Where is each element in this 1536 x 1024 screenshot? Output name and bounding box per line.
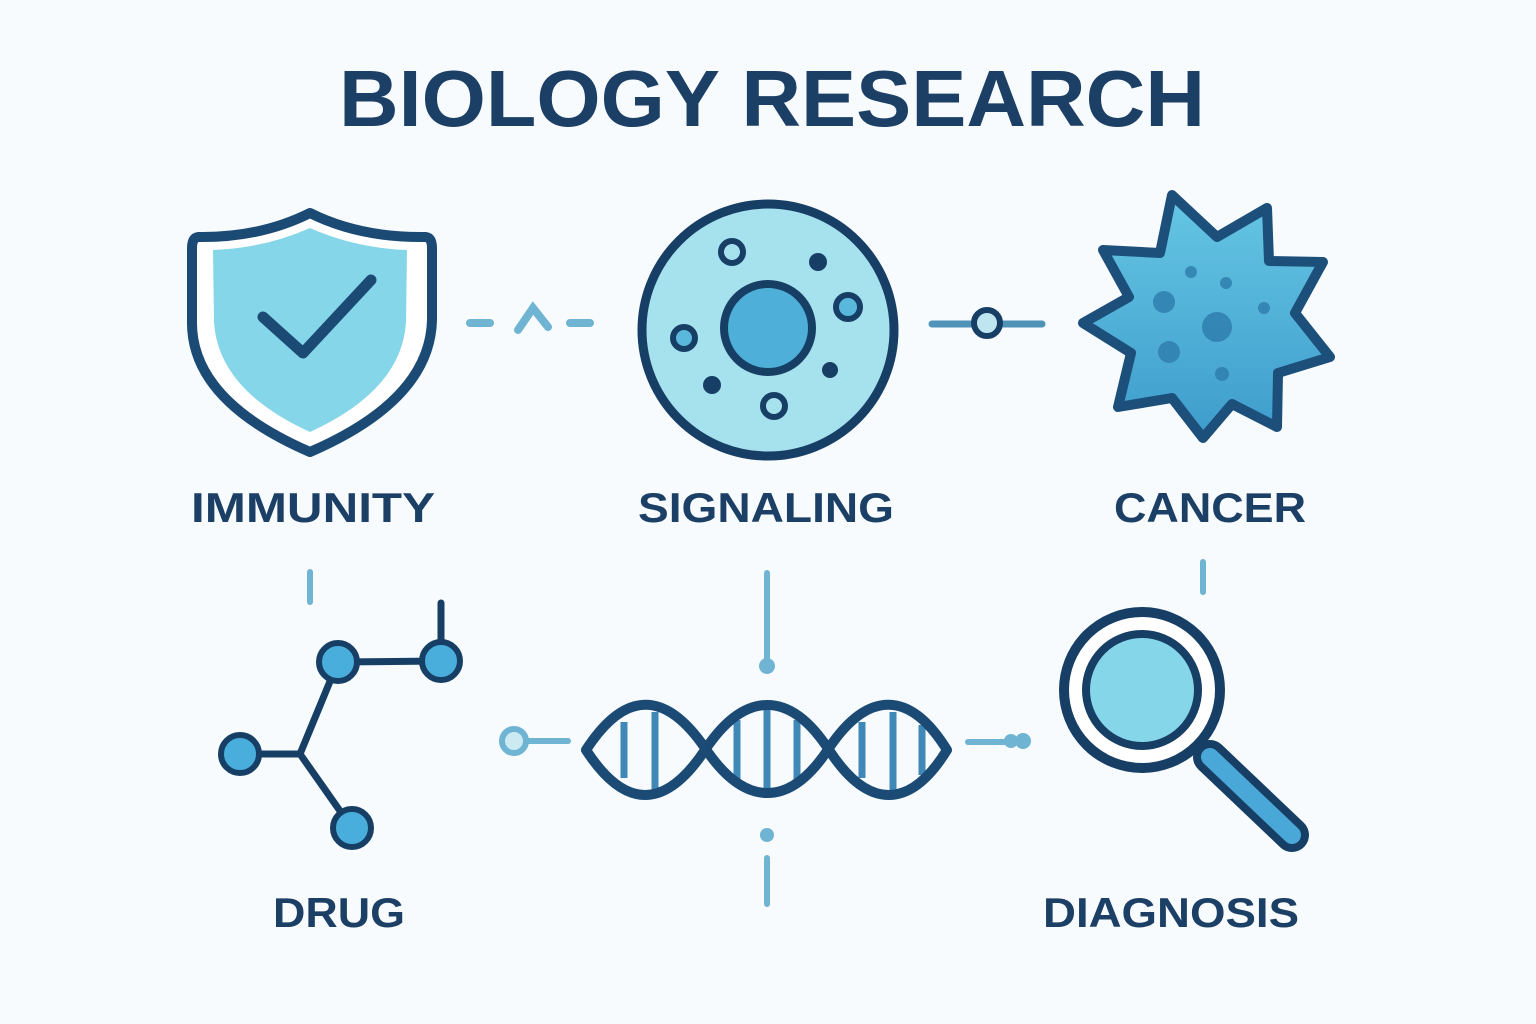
label: cancer: CANCER (1114, 484, 1306, 531)
icon: DNA helix (586, 705, 947, 795)
icon: signaling cell (642, 204, 894, 456)
icon: magnifier (1064, 612, 1292, 835)
label: immunity: IMMUNITY (191, 484, 435, 531)
label: signaling: SIGNALING (638, 484, 894, 531)
title: BIOLOGY RESEARCH (339, 54, 1205, 143)
label: drug: DRUG (273, 889, 405, 936)
icon: cancer cell (1083, 195, 1330, 438)
label: diagnosis: DIAGNOSIS (1043, 889, 1299, 936)
vertical connectors (310, 562, 1203, 904)
connector: shield to cell (470, 308, 590, 330)
icon: checkmark (263, 280, 371, 353)
connector: dna to diagnosis (968, 733, 1031, 749)
connector: cell to cancer (932, 310, 1042, 336)
connector: drug to dna (502, 729, 568, 753)
icon: shield (192, 213, 432, 452)
icon: drug molecule (221, 603, 460, 847)
